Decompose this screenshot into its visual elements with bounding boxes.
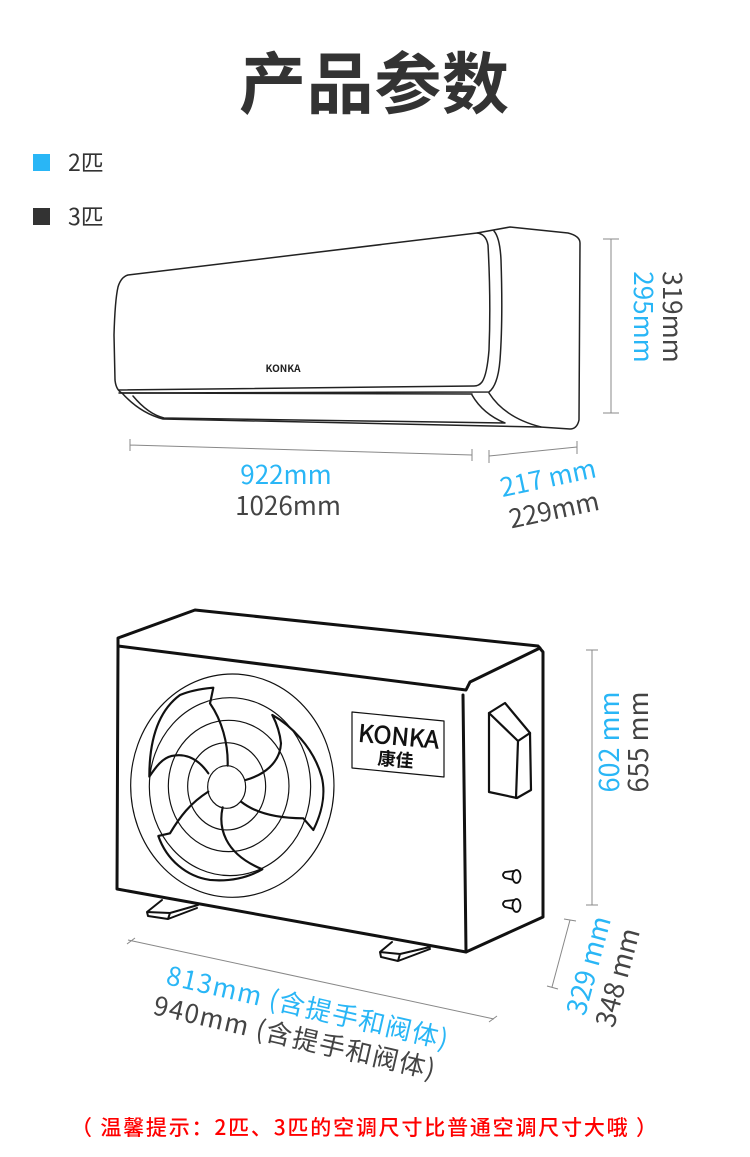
outdoor brand plate: KONKA [357, 714, 441, 756]
fan [131, 674, 334, 897]
right foot [380, 942, 430, 961]
legend item: 2匹: 2匹 [68, 144, 104, 178]
outdoor depth dimension line [547, 919, 576, 989]
legend item: 3匹: 3匹 [68, 198, 104, 232]
outdoor brand plate: 康佳 [377, 745, 415, 774]
label: 295mm: 295mm [626, 271, 663, 363]
outdoor width dimension line [127, 938, 497, 1022]
label: 217 mm: 217 mm [496, 449, 599, 505]
indoor unit drawing [114, 227, 580, 429]
label: 813mm (含提手和阀体): 813mm (含提手和阀体) [163, 956, 452, 1057]
label: 1026mm: 1026mm [235, 486, 341, 523]
label: 319mm: 319mm [655, 271, 692, 363]
label: 655 mm: 655 mm [617, 691, 656, 793]
side handle [489, 703, 531, 798]
label: 329 mm: 329 mm [555, 911, 619, 1019]
label: 922mm: 922mm [240, 455, 332, 492]
indoor height dimension line [603, 239, 619, 413]
outdoor unit drawing [117, 610, 543, 961]
valves [503, 870, 520, 912]
outdoor casing [117, 610, 543, 952]
indoor logo: KONKA [266, 360, 301, 375]
label: 229mm: 229mm [505, 481, 602, 536]
indoor width dimension line [130, 439, 472, 461]
label: 602 mm: 602 mm [588, 691, 627, 793]
title: 产品参数 [239, 31, 509, 128]
indoor depth dimension line [489, 441, 577, 463]
legend [33, 144, 104, 232]
outdoor brand plate [352, 712, 444, 777]
label: 940mm (含提手和阀体): 940mm (含提手和阀体) [150, 986, 439, 1087]
red note: （ 温馨提示：2匹、3匹的空调尺寸比普通空调尺寸大哦 ） [71, 1112, 657, 1142]
outdoor height dimension line [586, 650, 598, 905]
label: 348 mm: 348 mm [584, 923, 648, 1031]
left foot [147, 900, 198, 919]
